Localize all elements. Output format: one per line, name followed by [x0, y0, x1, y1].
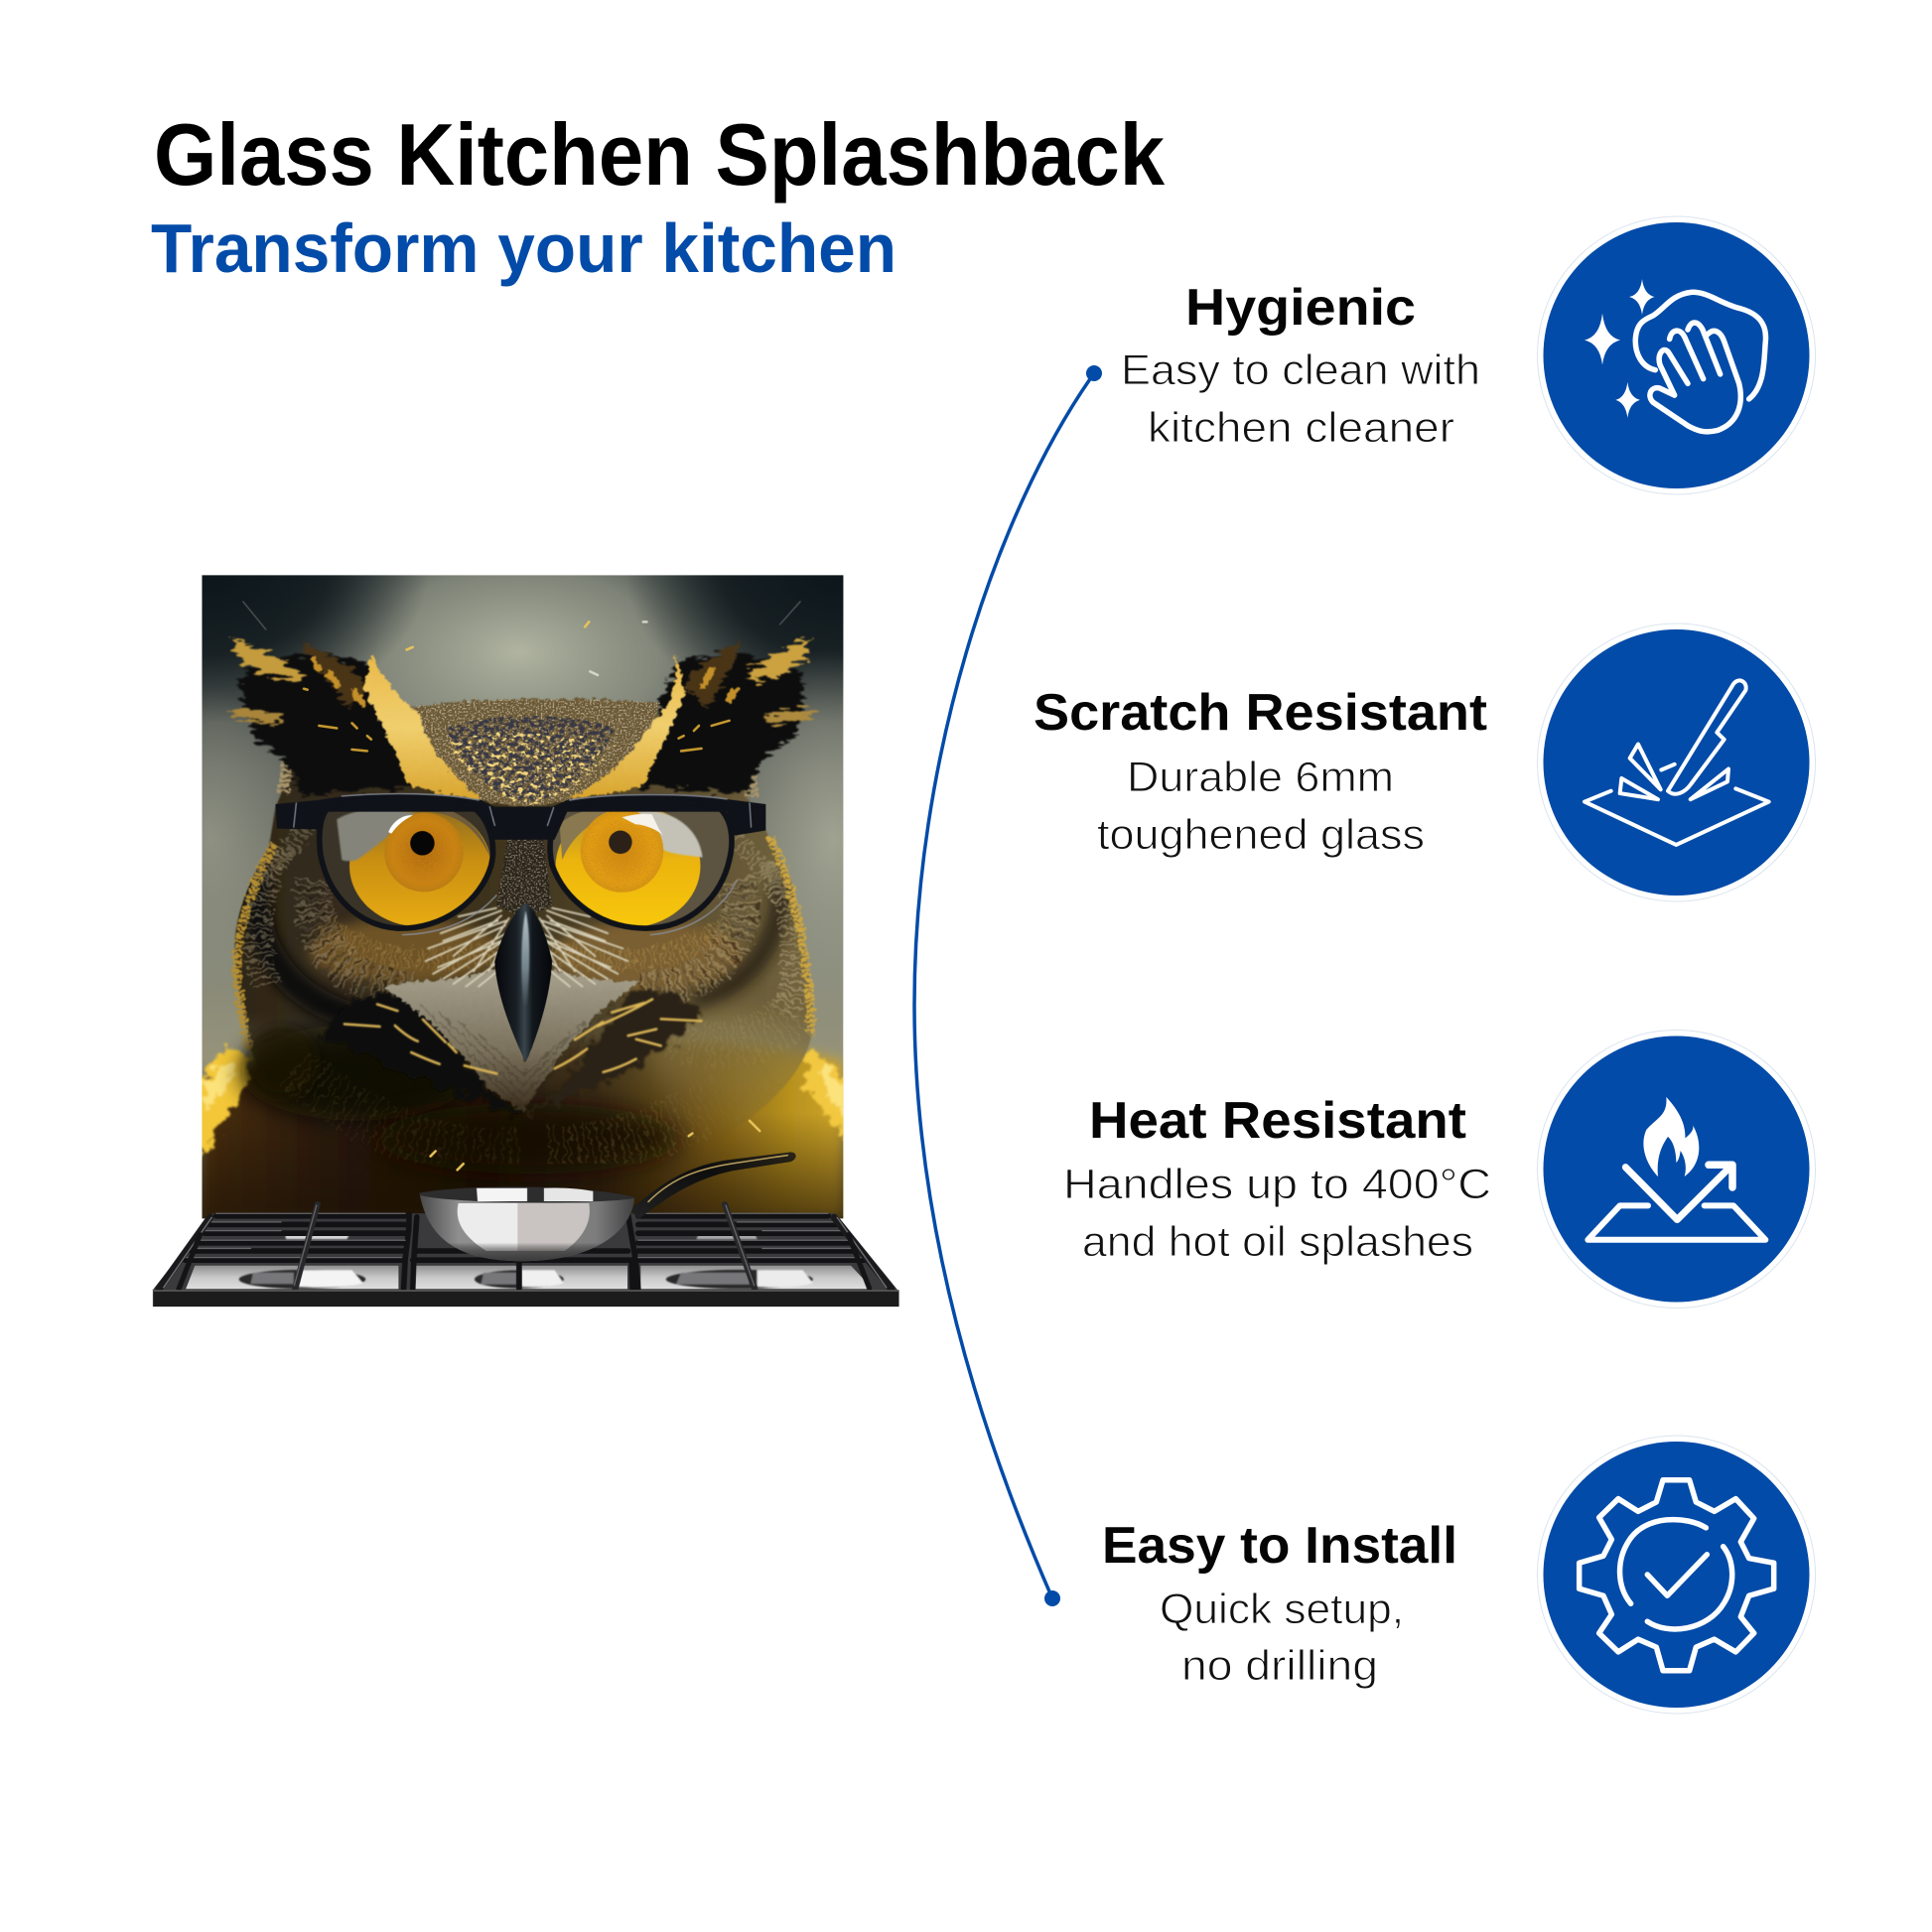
icon badge: knife scratching glass — [1537, 623, 1815, 901]
slanted grate bars — [294, 1204, 755, 1289]
right ear tuft — [638, 637, 819, 794]
hob top — [152, 1213, 897, 1291]
connector curve with end dots — [914, 365, 1102, 1606]
feature: scratch resistant — [1034, 684, 1487, 859]
lit reflections — [458, 1203, 517, 1251]
description: no drilling — [1181, 1642, 1378, 1690]
sparks — [243, 602, 800, 1170]
grate highlights — [185, 1213, 865, 1258]
product image: splashback with owl artwork above a gas hob — [153, 575, 899, 1307]
side rails — [159, 1217, 892, 1289]
hob front edge — [153, 1290, 899, 1307]
nose bridge — [496, 840, 552, 914]
head fur — [250, 814, 818, 1106]
head and upper body — [235, 759, 818, 1144]
deflection arrow — [1625, 1168, 1727, 1219]
icon badge: flame on heat deflecting surface — [1537, 1031, 1815, 1309]
subtitle: Transform your kitchen — [151, 209, 897, 287]
heading: Scratch Resistant — [1034, 684, 1487, 742]
top dot — [1086, 365, 1102, 381]
forehead — [403, 699, 661, 807]
description — [1063, 1161, 1491, 1266]
description — [1121, 346, 1480, 452]
description: Durable 6mm — [1127, 754, 1394, 801]
frame highlights — [294, 793, 752, 935]
left lens and eye — [322, 811, 490, 925]
right lens and eye — [552, 811, 729, 925]
smoky background — [202, 575, 844, 1219]
golden inner ear feathers — [363, 653, 686, 800]
frying pan — [419, 1152, 796, 1261]
glasses — [275, 793, 765, 936]
title: Glass Kitchen Splashback — [154, 105, 1166, 204]
lower face V-shaped feathers — [324, 969, 702, 1116]
chevron lines — [419, 1004, 614, 1099]
frames — [275, 794, 765, 928]
pan interior — [419, 1186, 634, 1207]
bottom dot — [1044, 1590, 1060, 1606]
glass shards — [1620, 745, 1728, 799]
heading: Easy to Install — [1102, 1517, 1457, 1575]
flame — [1643, 1097, 1699, 1176]
cream wedge — [382, 969, 640, 1112]
glowing gold plumage at the shoulders — [194, 1044, 854, 1159]
surface — [1587, 1205, 1765, 1240]
gear outline — [1580, 1480, 1774, 1671]
pan handle — [630, 1152, 796, 1219]
left ear tuft — [227, 639, 413, 794]
burners — [239, 1233, 813, 1289]
hand — [1650, 323, 1740, 432]
sparkles — [1585, 279, 1655, 418]
inner ring — [1620, 1520, 1732, 1629]
description — [1160, 1586, 1404, 1690]
description: Handles up to 400°C — [1063, 1161, 1491, 1208]
knife — [1668, 680, 1746, 794]
description — [1097, 754, 1425, 859]
splashback panel artwork — [152, 575, 897, 1291]
grates — [185, 1214, 865, 1289]
lower warm glow and body — [202, 1037, 843, 1219]
heading: Heat Resistant — [1089, 1092, 1466, 1150]
head base — [235, 759, 813, 1144]
description: and hot oil splashes — [1082, 1218, 1473, 1266]
chest shadows — [240, 1025, 767, 1173]
inner highlights — [477, 1188, 527, 1201]
glass plate — [1585, 788, 1769, 845]
feature: easy to install — [1102, 1517, 1457, 1690]
steel plates — [186, 1266, 873, 1289]
feature: heat resistant — [1063, 1092, 1491, 1266]
cloth — [1635, 292, 1766, 399]
beak — [494, 902, 552, 1062]
check mark — [1647, 1555, 1707, 1595]
description: Quick setup, — [1160, 1586, 1404, 1633]
gas hob — [152, 1204, 899, 1307]
dark side feathers — [324, 992, 523, 1116]
feature: hygienic — [1121, 279, 1480, 452]
heading: Hygienic — [1185, 279, 1416, 337]
beak feathers fan — [425, 908, 628, 987]
pan bowl — [420, 1195, 634, 1261]
icon badge: gear with check mark — [1537, 1436, 1815, 1714]
description: kitchen cleaner — [1148, 404, 1454, 452]
description: Easy to clean with — [1121, 346, 1480, 394]
description: toughened glass — [1097, 811, 1425, 859]
gold feather tips — [345, 999, 702, 1073]
gold rim of the head — [237, 759, 811, 1049]
icon badge: hand wiping with sparkles — [1537, 216, 1815, 494]
